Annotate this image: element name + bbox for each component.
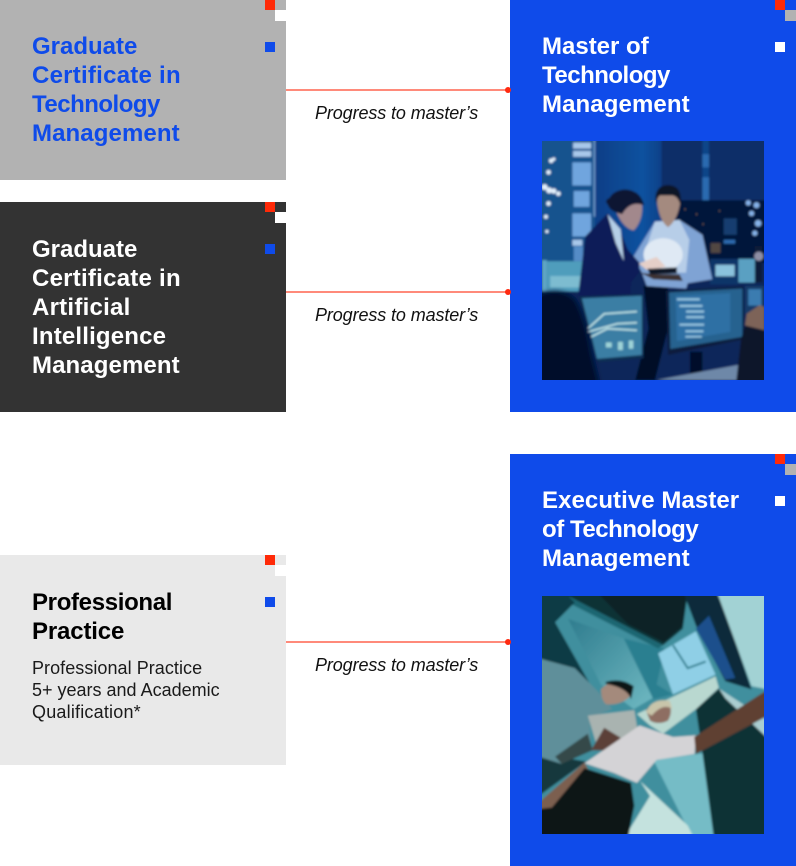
- hands and tablet: [639, 257, 666, 270]
- heading: Graduate Certificate in Artificial Intelligence Management: [32, 236, 181, 379]
- icon: white square: [775, 496, 785, 506]
- label: Progress to master's: Progress to master’s: [315, 103, 478, 123]
- ceiling: [562, 593, 688, 645]
- icon: blue square: [265, 244, 275, 254]
- man legs: [635, 286, 668, 380]
- woman body: [578, 213, 640, 296]
- heading: Executive Master of Technology Management: of Technology: [542, 516, 698, 543]
- left arm: [539, 763, 588, 812]
- window: [658, 631, 716, 694]
- front monitor left: [579, 294, 644, 362]
- rear walls: [568, 619, 653, 709]
- woman head: [614, 204, 642, 231]
- heading: Graduate Certificate in Technology Management: [32, 33, 181, 147]
- wall: [594, 138, 663, 269]
- back monitors: [542, 260, 547, 291]
- heading: Professional Practice: Practice: [32, 618, 124, 645]
- icon: white square: [275, 10, 286, 21]
- skirt: [539, 768, 634, 839]
- heading: Master of Technology Management: Management: [542, 91, 690, 118]
- heading: Graduate Certificate in Artificial Intelligence Management: Graduate: [32, 236, 137, 263]
- heading: Executive Master of Technology Management: Management: [542, 545, 690, 572]
- label: Progress to master's: Progress to master’s: [315, 305, 478, 325]
- heading: Graduate Certificate in Artificial Intelligence Management: Certificate in: [32, 265, 181, 292]
- connector dot: [505, 289, 511, 295]
- panel: Graduate Certificate in Technology Management: [0, 0, 286, 180]
- shirt: [585, 725, 696, 783]
- panel: Graduate Certificate in Artificial Intelligence Management: [0, 202, 286, 412]
- icon: grey square: [785, 10, 796, 21]
- panel: Professional Practice: [0, 555, 286, 765]
- man body: [539, 658, 612, 764]
- man head: [601, 683, 631, 704]
- left rack: [539, 593, 591, 686]
- heading: Master of Technology Management: Master of: [542, 33, 649, 60]
- front monitor right: [666, 287, 744, 355]
- icon: red square: [265, 202, 275, 212]
- icon: red square: [265, 555, 275, 565]
- text: Professional Practice description: Qualification*: [32, 702, 141, 722]
- icon: white square: [775, 42, 785, 52]
- lower wall: [653, 753, 714, 839]
- panel: Executive Master of Technology Management: [510, 454, 796, 866]
- heading: Graduate Certificate in Technology Management: Certificate in: [32, 62, 181, 89]
- heading: Professional Practice: [32, 589, 172, 645]
- heading: Executive Master of Technology Management: Executive Master: [542, 487, 739, 514]
- heading: Graduate Certificate in Technology Management: Technology: [32, 91, 160, 118]
- icon: white square: [275, 212, 286, 223]
- connector: technology certificate to master: [286, 89, 508, 91]
- icon: red square: [775, 0, 785, 10]
- connector dot: [505, 639, 511, 645]
- image: two colleagues in a server room viewed from below: [542, 596, 764, 834]
- left display wall: [539, 138, 595, 261]
- heading: Graduate Certificate in Artificial Intelligence Management: Management: [32, 352, 180, 379]
- upper right rack: [683, 593, 752, 689]
- heading: Graduate Certificate in Artificial Intelligence Management: Artificial: [32, 294, 131, 321]
- right arm: [694, 689, 768, 754]
- icon: blue square: [265, 597, 275, 607]
- heading: Professional Practice: Professional: [32, 589, 172, 616]
- panel: Master of Technology Management: [510, 0, 796, 412]
- heading: Master of Technology Management: [542, 33, 690, 118]
- connector: professional practice to executive master: [286, 641, 508, 643]
- woman head: [646, 702, 671, 723]
- bottom left rack: [539, 753, 586, 796]
- image: two colleagues with a tablet in a control room: [542, 141, 764, 380]
- icon: white square: [275, 565, 286, 576]
- heading: Graduate Certificate in Technology Management: Graduate: [32, 33, 137, 60]
- foreground silhouettes: [539, 291, 599, 385]
- heading: Master of Technology Management: Technology: [542, 62, 670, 89]
- heading: Graduate Certificate in Artificial Intelligence Management: Intelligence: [32, 323, 166, 350]
- lower right dark wall: [696, 688, 768, 839]
- text: Professional Practice description: Professional Practice: [32, 658, 202, 678]
- icon: red square: [265, 0, 275, 10]
- heading: Executive Master of Technology Management: [542, 487, 739, 572]
- cables: [637, 676, 719, 734]
- heading: Graduate Certificate in Technology Management: Management: [32, 120, 180, 147]
- text: Professional Practice description: [32, 658, 220, 722]
- tablet: [588, 710, 639, 744]
- text: Professional Practice description: 5+ years and Academic: [32, 680, 220, 700]
- man head: [657, 186, 681, 227]
- label: Progress to master's: Progress to master’s: [315, 655, 478, 675]
- icon: blue square: [265, 42, 275, 52]
- man shirt: [634, 220, 712, 288]
- icon: grey square: [785, 464, 796, 475]
- icon: red square: [775, 454, 785, 464]
- connector dot: [505, 87, 511, 93]
- connector: AI certificate to master: [286, 291, 508, 293]
